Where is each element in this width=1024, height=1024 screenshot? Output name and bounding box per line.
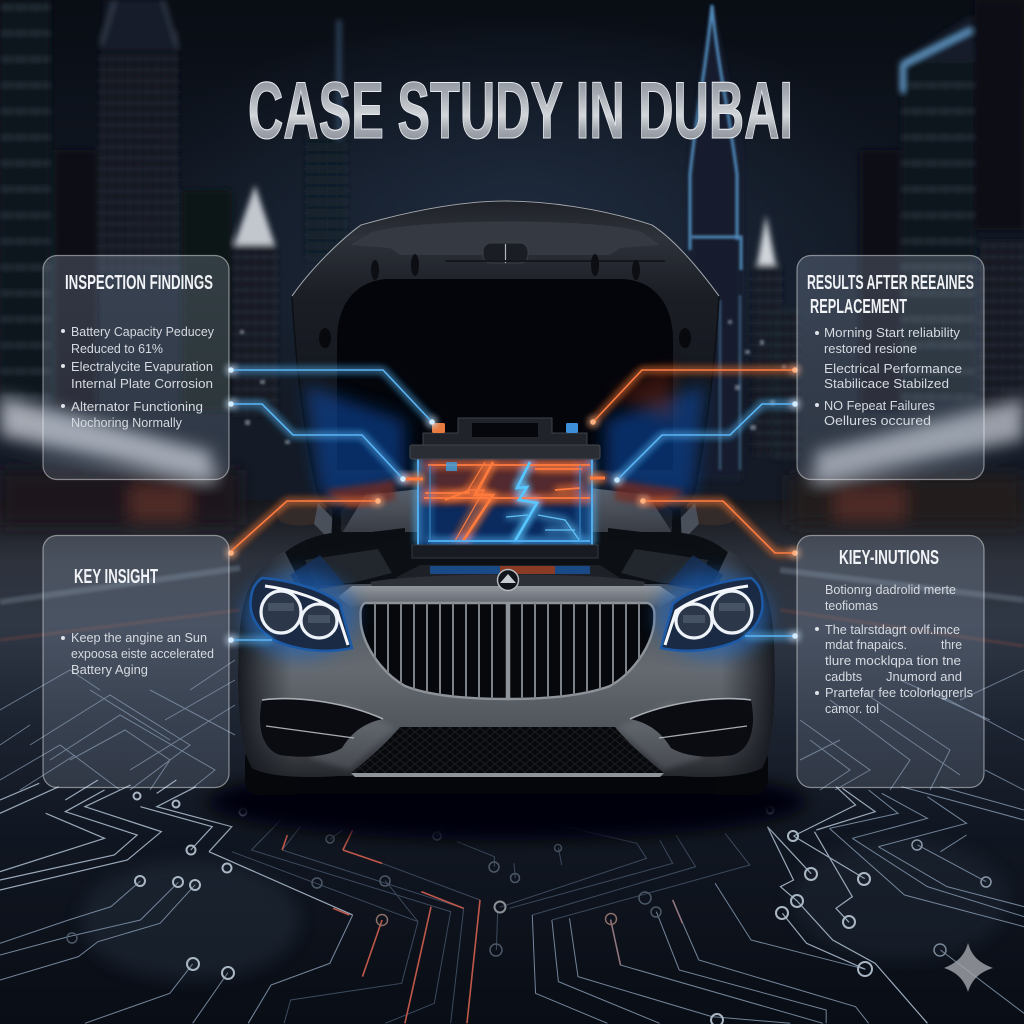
heading: results after replacement: [807, 272, 974, 318]
insight list: expoosa eiste accelerated: [71, 647, 214, 661]
heading: key intuitions: KIEY-INUTIONS: [839, 547, 939, 569]
car body: [238, 538, 775, 777]
battery glass case: [418, 458, 592, 545]
intuitions text: Prartefar fee tcolorlogrerls: [825, 686, 973, 700]
engine bay: [285, 532, 728, 592]
results list: restored resione: [824, 342, 917, 356]
lower centre intake: [351, 727, 664, 777]
findings list: Nochoring Normally: [71, 416, 183, 430]
intuitions text: cadbts: [825, 670, 862, 684]
findings list: [61, 325, 215, 430]
heading: results after replacement: REPLACEMENT: [810, 296, 907, 318]
intuitions text: mdat fnapaics.: [825, 638, 907, 652]
circuit traces on the ground near panels: [0, 660, 1024, 790]
intuitions text: Jnumord and: [886, 670, 962, 684]
findings list: Alternator Functioning: [71, 400, 203, 414]
intuitions text: teofiomas: [825, 599, 878, 613]
battery lid: [410, 445, 600, 459]
panel: inspection findings: [43, 256, 229, 480]
results list: Stabilicace Stabilzed: [824, 377, 949, 391]
leader lines with glowing nodes: [228, 367, 798, 643]
hood struts: [305, 500, 708, 550]
results list: NO Fepeat Failures: [824, 399, 935, 413]
chrome hood band: [338, 586, 676, 608]
headlights: [242, 571, 771, 659]
intuitions text: camor. tol: [825, 702, 879, 716]
intuitions text: Botionrg dadrolid merte: [825, 583, 956, 597]
findings list: Battery Capacity Peducey: [71, 325, 215, 339]
intuitions text: [815, 583, 973, 716]
findings list: Internal Plate Corrosion: [71, 377, 213, 391]
battery base: [412, 545, 598, 558]
background: road with bokeh lights: [0, 396, 1024, 1024]
heading: inspection findings: INSPECTION FINDINGS: [65, 272, 213, 294]
results list: Electrical Performance: [824, 362, 962, 376]
heading: key insight: KEY INSIGHT: [74, 566, 158, 588]
panel: key intuitions: [797, 536, 984, 788]
intuitions text: thre: [941, 638, 962, 652]
intuitions text: tlure mocklqpa tion tne: [825, 654, 961, 668]
lower side intakes: [260, 699, 753, 757]
background: blurred Dubai skyline: [0, 0, 1024, 480]
battery terminals: [432, 423, 445, 433]
hood panel top fascia: [370, 574, 645, 592]
icon: sparkle watermark: [944, 943, 993, 992]
findings list: Reduced to 61%: [71, 342, 163, 356]
results list: Oellures occured: [824, 414, 931, 428]
results list: Morning Start reliability: [824, 326, 961, 340]
intuitions text: The talrstdagrt ovlf.imce: [825, 623, 960, 637]
car shadow and tires: [207, 745, 807, 840]
glowing battery: [410, 418, 600, 558]
car: front view with open hood: [207, 201, 807, 840]
background: central glow: [120, 10, 920, 430]
grille: [360, 600, 654, 700]
battery energy lines: [418, 458, 592, 545]
insight list: [61, 631, 214, 677]
side mirrors: [277, 499, 736, 540]
panel: results after replacement: [797, 256, 984, 480]
circuit board floor: [0, 780, 1024, 1024]
raised hood: [292, 201, 719, 510]
insight list: Keep the angine an Sun: [71, 631, 207, 645]
results list: [815, 326, 962, 428]
windshield behind hood: [335, 488, 680, 545]
emblem: [498, 570, 518, 590]
insight list: Battery Aging: [71, 663, 148, 677]
panel: key insight: [43, 536, 229, 788]
findings list: Electralycite Evapuration: [71, 360, 213, 374]
bokeh city lights: [240, 320, 786, 444]
